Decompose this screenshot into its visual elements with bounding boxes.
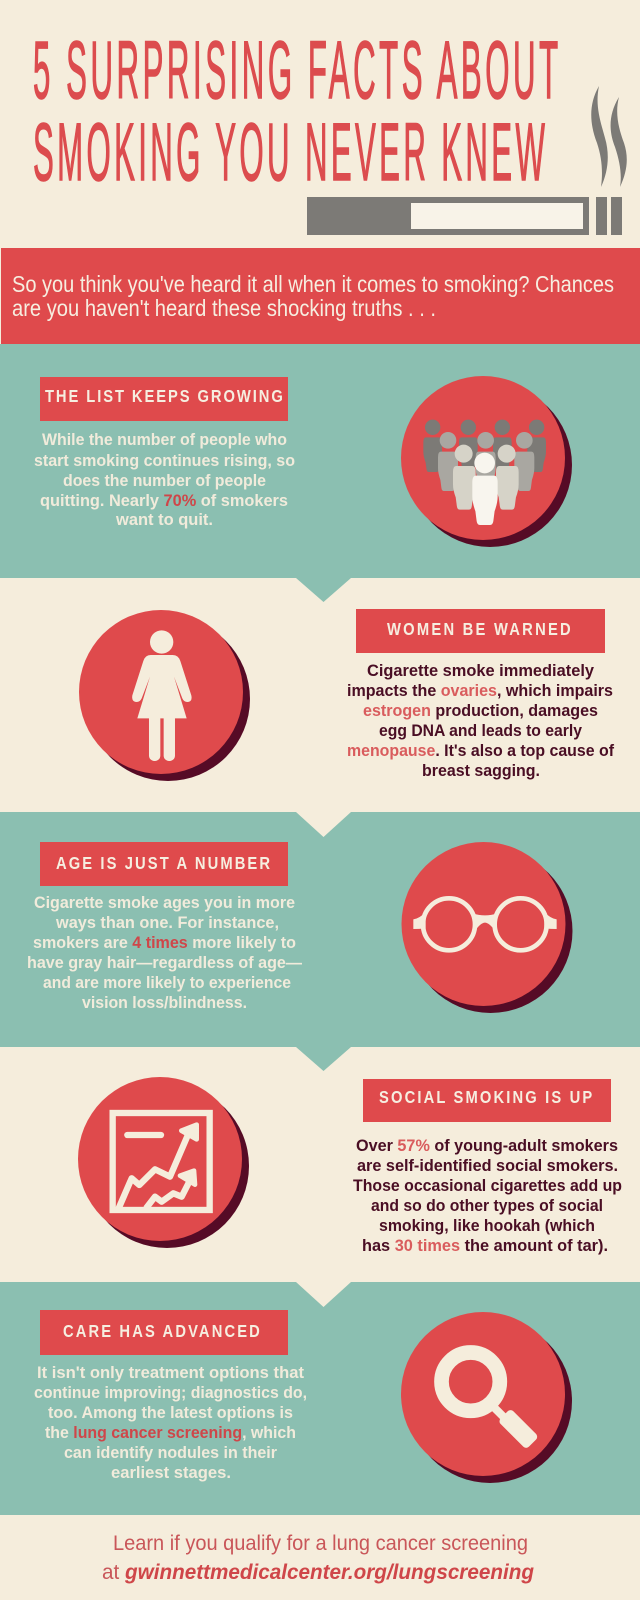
body text: start smoking continues rising, so <box>34 452 295 470</box>
panel: care has advanced <box>0 1282 640 1515</box>
icon: woman <box>79 610 250 781</box>
heading: CARE HAS ADVANCED <box>63 1322 260 1341</box>
section background <box>0 1282 640 1515</box>
body text: Those occasional cigarettes add up <box>353 1177 622 1195</box>
heading: SOCIAL SMOKING IS UP <box>379 1088 592 1107</box>
panel: age is just a number <box>0 812 640 1071</box>
body text: estrogen production, damages <box>363 702 598 720</box>
body text: Over 57% of young-adult smokers <box>356 1137 618 1155</box>
heading <box>356 609 605 653</box>
icon: rising chart <box>78 1077 249 1248</box>
body text: and are more likely to experience <box>43 974 291 992</box>
intro banner: are you haven't heard these shocking truths . . . <box>12 295 436 321</box>
body text: want to quit. <box>115 511 213 529</box>
footer call to action: at gwinnettmedicalcenter.org/lungscreening <box>102 1560 534 1584</box>
body text: breast sagging. <box>422 762 540 780</box>
body text: It isn't only treatment options that <box>37 1364 304 1382</box>
intro banner <box>1 248 640 344</box>
icon: crowd of people <box>401 376 572 547</box>
section background <box>0 344 640 602</box>
body text: earliest stages. <box>111 1464 231 1482</box>
body text: menopause. It's also a top cause of <box>347 742 614 760</box>
body text: egg DNA and leads to early <box>379 722 583 740</box>
body text <box>353 1137 622 1255</box>
body text: and so do other types of social <box>371 1197 603 1215</box>
heading: THE LIST KEEPS GROWING <box>45 387 283 406</box>
footer call to action: Learn if you qualify for a lung cancer screening <box>113 1531 528 1555</box>
body text: smoking, like hookah (which <box>379 1217 595 1235</box>
footer call to action <box>102 1531 534 1584</box>
icon: magnifying glass <box>401 1312 572 1483</box>
body text: too. Among the latest options is <box>48 1404 293 1422</box>
panel: women be warned <box>79 609 614 781</box>
body text: smokers are 4 times more likely to <box>33 934 296 952</box>
icon: glasses <box>402 842 572 1013</box>
heading <box>363 1079 611 1122</box>
panel: social smoking is up <box>78 1077 622 1255</box>
body text: quitting. Nearly 70% of smokers <box>40 492 288 510</box>
heading <box>40 1310 288 1355</box>
body text: the lung cancer screening, which <box>45 1424 296 1442</box>
body text: can identify nodules in their <box>64 1444 278 1462</box>
body text: have gray hair—regardless of age— <box>27 954 302 972</box>
section background <box>0 812 640 1071</box>
body text: vision loss/blindness. <box>82 994 247 1012</box>
body text: are self-identified social smokers. <box>357 1157 618 1175</box>
heading: AGE IS JUST A NUMBER <box>56 854 270 873</box>
title: 5 SURPRISING FACTS ABOUT <box>33 25 558 117</box>
icon: cigarette with smoke <box>307 86 627 235</box>
body text: Cigarette smoke immediately <box>367 662 595 680</box>
heading <box>40 842 288 886</box>
body text: While the number of people who <box>42 431 287 449</box>
panel: the list keeps growing <box>0 344 640 602</box>
body text <box>27 894 302 1012</box>
body text: Cigarette smoke ages you in more <box>34 894 295 912</box>
body text: impacts the ovaries, which impairs <box>347 682 613 700</box>
heading: WOMEN BE WARNED <box>387 620 571 639</box>
body text <box>34 431 295 529</box>
body text: does the number of people <box>63 472 266 490</box>
body text <box>347 662 614 780</box>
body text: has 30 times the amount of tar). <box>362 1237 608 1255</box>
body text: ways than one. For instance, <box>55 914 279 932</box>
title <box>33 25 558 199</box>
body text <box>34 1364 307 1482</box>
title: SMOKING YOU NEVER KNEW <box>33 107 545 199</box>
body text: continue improving; diagnostics do, <box>34 1384 307 1402</box>
heading <box>40 377 288 421</box>
